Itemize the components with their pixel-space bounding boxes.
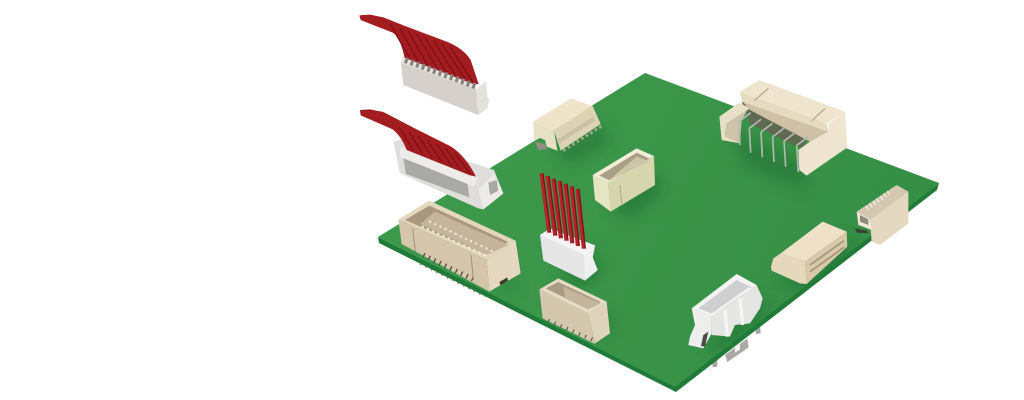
illustration: circuit board with connectors bbox=[359, 14, 939, 392]
red wire bundle bbox=[359, 15, 479, 85]
connector: top red wire housing bbox=[359, 15, 489, 115]
connector: beige SMT top bbox=[533, 98, 602, 151]
red wire bundle bbox=[360, 109, 476, 177]
under-board tabs and pins bbox=[712, 325, 761, 367]
connector: right-angle header top right bbox=[719, 80, 847, 176]
connector: flat beige FFC bbox=[771, 222, 847, 284]
pins below left board edge bbox=[420, 264, 485, 297]
red wires bbox=[541, 173, 583, 249]
connector: small beige header front bbox=[539, 278, 610, 344]
silver pins bbox=[739, 113, 808, 172]
connector: large double-row header bbox=[398, 201, 521, 292]
circuit board bbox=[378, 73, 939, 392]
connector: FFC right edge bbox=[855, 185, 908, 245]
connector: beige shrouded header upper bbox=[593, 148, 655, 212]
connector: lower red wire housing bbox=[360, 109, 503, 209]
connector: red vertical wire plug bbox=[540, 173, 598, 281]
connector: white latch header bbox=[688, 274, 763, 348]
connector shadows bbox=[558, 126, 850, 350]
